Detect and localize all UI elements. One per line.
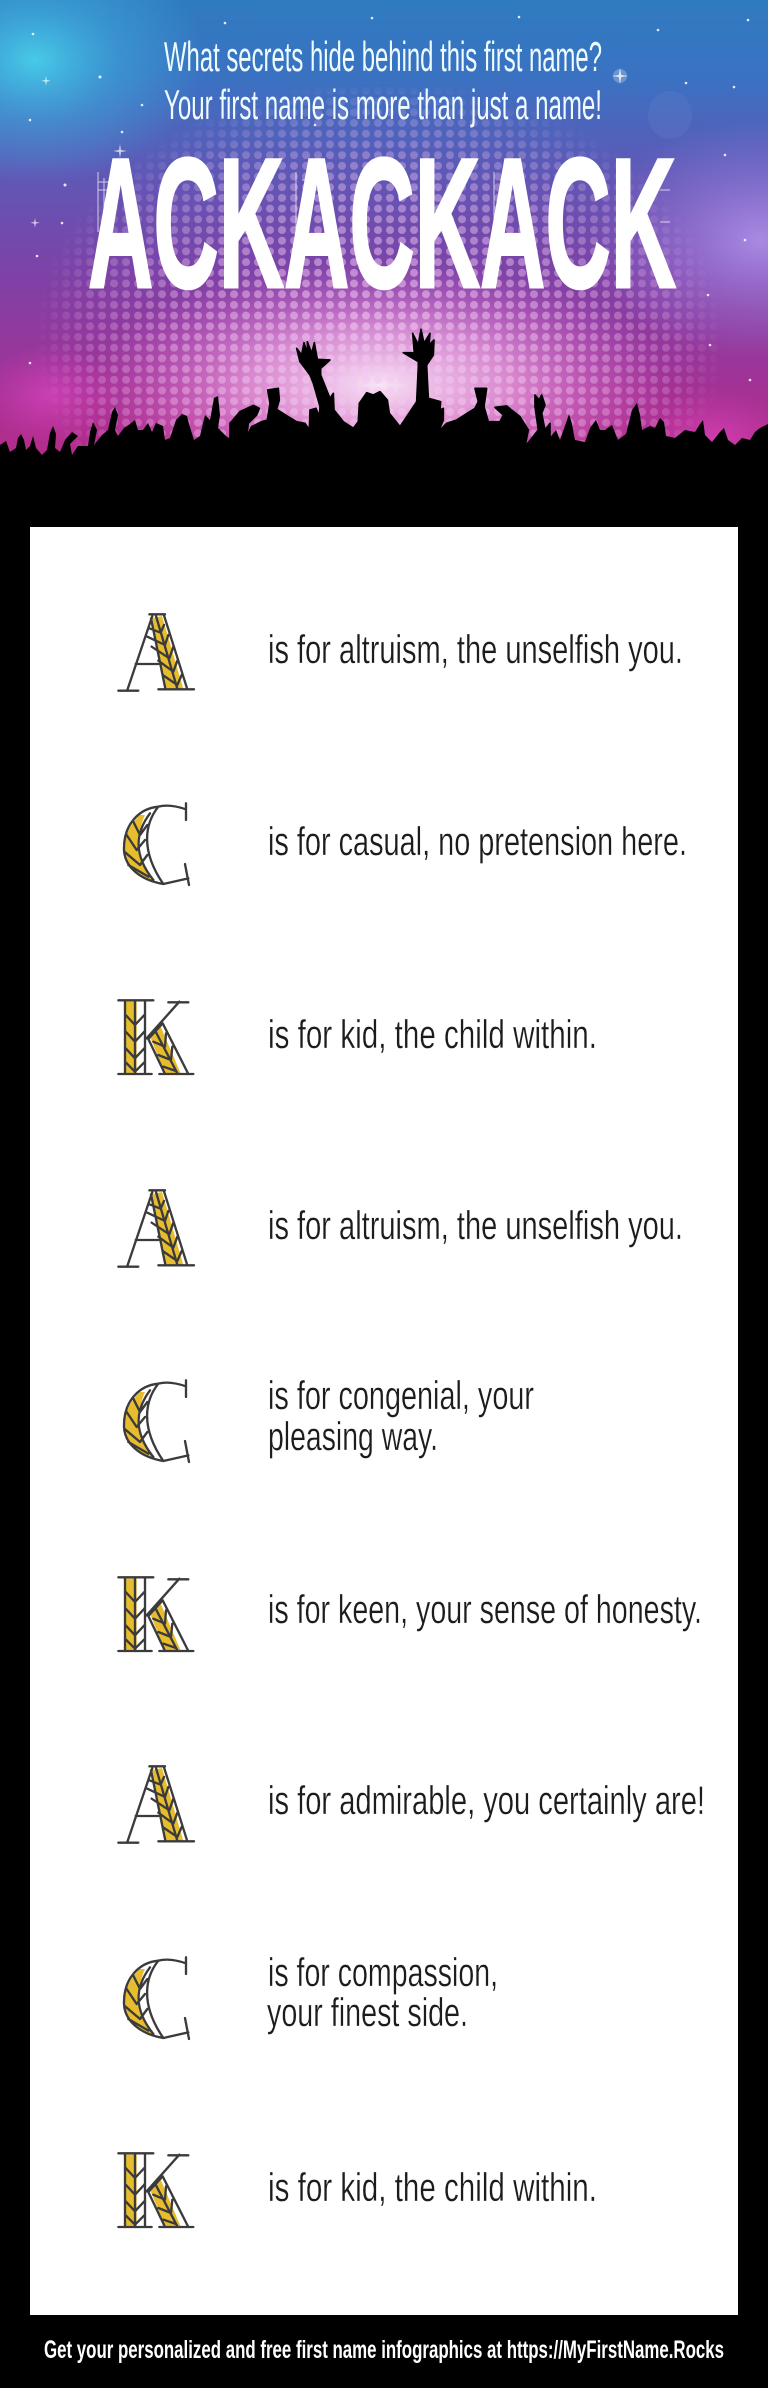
icon: wheat letter K: [118, 1577, 193, 1651]
sparkles: [30, 68, 628, 228]
row 5: letter C: [122, 1374, 534, 1464]
row 3: letter K: [117, 999, 597, 1076]
row 6: letter K: [117, 1576, 702, 1652]
text: compassion: is for compassion,: [268, 1951, 498, 1995]
icon: wheat letter C: [124, 1380, 189, 1462]
title distress marks: [98, 172, 670, 232]
text: congenial: pleasing way.: [268, 1415, 438, 1459]
row 9: letter K: [117, 2152, 597, 2228]
stars: [29, 16, 751, 381]
row 1: letter A: [117, 613, 683, 692]
text: compassion: [267, 1951, 498, 2035]
icon: wheat letter C: [124, 803, 189, 885]
header: concert stage banner: [0, 0, 768, 455]
stage glows: [0, 0, 768, 510]
text: congenial: [268, 1374, 534, 1459]
text: compassion: your finest side.: [267, 1991, 468, 2035]
row 7: letter A: [117, 1765, 705, 1844]
icon: wheat letter K: [118, 1000, 193, 1074]
icon: wheat letter A: [118, 614, 194, 691]
text: kid: is for kid, the child within.: [268, 1013, 597, 1057]
crowd silhouette: [0, 329, 768, 530]
row 4: letter A: [117, 1189, 683, 1268]
dot matrix light wall: [50, 88, 706, 446]
background gradient: [0, 0, 768, 480]
text: kid: is for kid, the child within.: [268, 2166, 597, 2210]
panel: white letter list: [30, 527, 738, 2315]
row 2: letter C: [122, 802, 687, 886]
icon: wheat letter A: [118, 1766, 194, 1843]
icon: wheat letter A: [118, 1190, 194, 1267]
text: congenial: is for congenial, your: [268, 1374, 534, 1418]
icon: wheat letter K: [118, 2153, 193, 2227]
icon: wheat letter C: [124, 1957, 189, 2039]
row 8: letter C: [122, 1951, 498, 2040]
tagline: [164, 33, 602, 128]
